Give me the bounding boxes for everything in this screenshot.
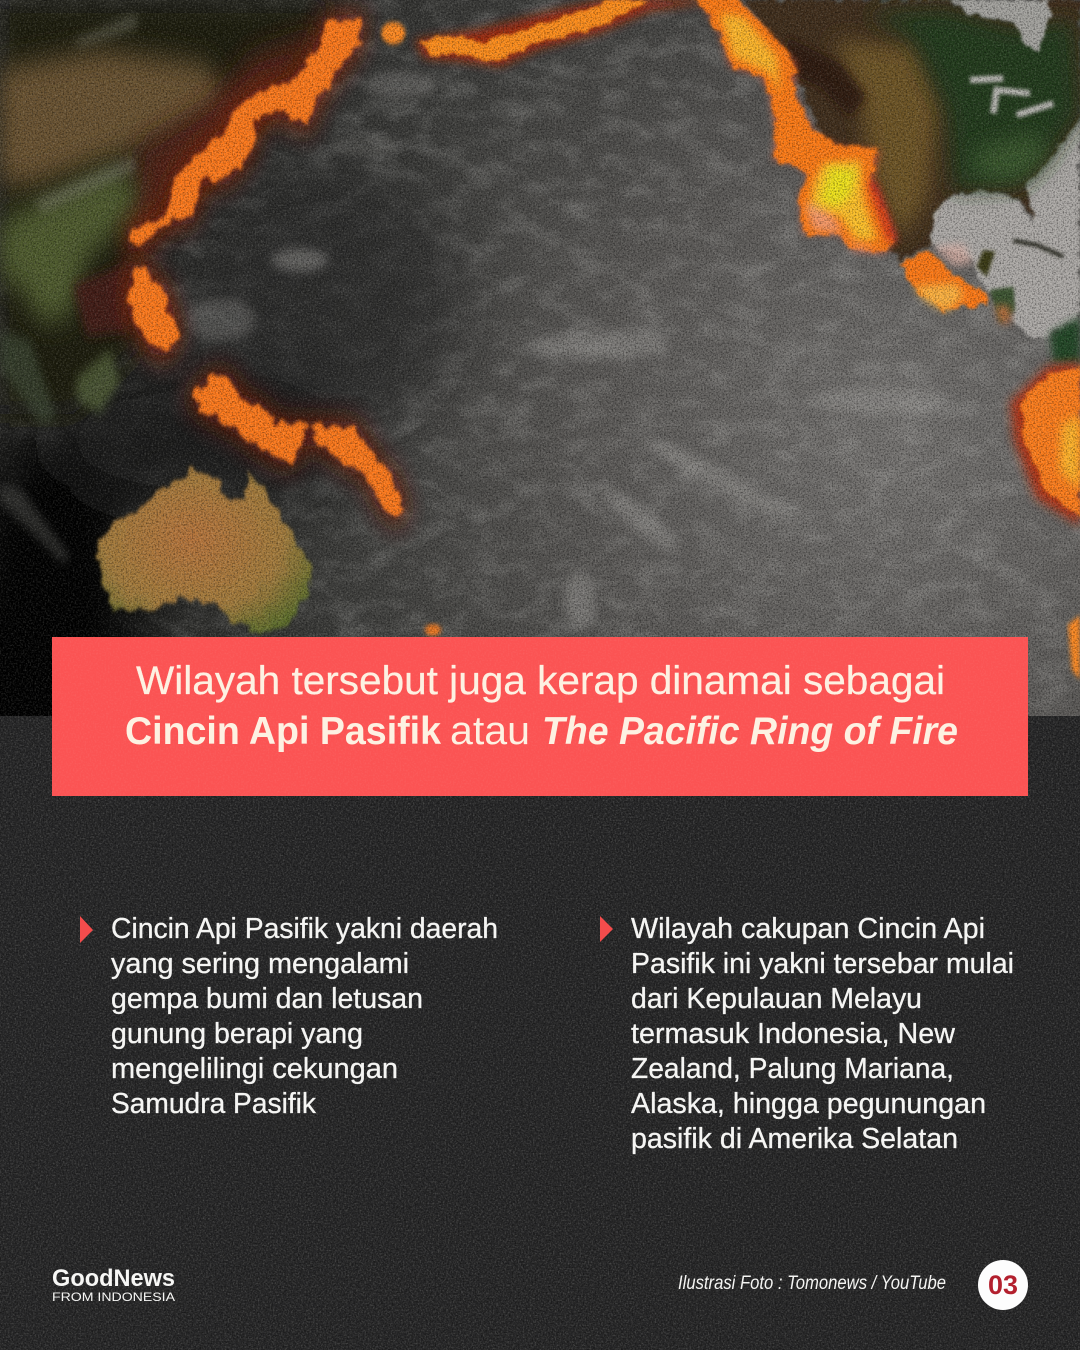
logo: GoodNews from Indonesia: [52, 1265, 175, 1304]
left body text: Cincin Api Pasifik yakni daerah: [111, 913, 498, 945]
ring of fire: western arc, Japan to Philippines: [130, 21, 405, 517]
land: Australia: [97, 469, 310, 635]
right body text: Zealand, Palung Mariana,: [631, 1053, 954, 1085]
right body text: [631, 913, 1014, 1155]
bullet column: right: [600, 913, 1014, 1155]
page number badge: 03: [988, 1270, 1018, 1300]
logo: GoodNews from Indonesia: FROM INDONESIA: [52, 1290, 175, 1304]
ring of fire: New Guinea and Melanesia: [192, 377, 403, 518]
right body text: dari Kepulauan Melayu: [631, 983, 922, 1015]
land: North America: [747, 0, 1080, 363]
ring of fire: northern arc: [415, 0, 720, 66]
title line two: Cincin Api Pasifik: [125, 710, 442, 753]
dark western ocean shading: [0, 170, 460, 770]
black lower-left corner: [0, 680, 22, 716]
left body text: [111, 913, 498, 1120]
title line two: The Pacific Ring of Fire: [542, 710, 958, 753]
ring of fire: North and Central America: [700, 0, 1010, 323]
icon: red triangle bullet: [80, 916, 93, 943]
icon: red triangle bullet: [600, 916, 613, 942]
background photo: Pacific Ring of Fire map: [0, 0, 1080, 770]
right body text: termasuk Indonesia, New: [631, 1018, 955, 1050]
right body text: pasifik di Amerika Selatan: [631, 1123, 958, 1155]
land: Asia and Southeast Asia: [0, 0, 333, 635]
title line two: [125, 709, 958, 753]
page number badge: [978, 1260, 1028, 1310]
ring of fire: small ember: [381, 22, 405, 44]
title line two: atau: [450, 709, 530, 753]
title line one: Wilayah tersebut juga kerap dinamai sebagai: [136, 659, 945, 703]
Greenland / Canada gray land: [950, 0, 1050, 53]
left body text: yang sering mengalami: [111, 948, 409, 980]
dark lower panel: [0, 716, 1080, 1350]
left body text: gunung berapi yang: [111, 1018, 363, 1050]
left body text: gempa bumi dan letusan: [111, 983, 423, 1015]
title banner: [52, 637, 1028, 796]
photo credit: Ilustrasi Foto : Tomonews / YouTube: [678, 1273, 946, 1294]
ring of fire: Philippines: [130, 269, 177, 352]
logo: GoodNews from Indonesia: GoodNews: [52, 1265, 175, 1292]
bullet column: left: [80, 913, 498, 1120]
left body text: Samudra Pasifik: [111, 1088, 317, 1120]
right body text: Wilayah cakupan Cincin Api: [631, 913, 985, 945]
ocean clouds: [184, 71, 950, 630]
ocean cloud mottling: [0, 0, 1080, 716]
right body text: Alaska, hingga pegunungan: [631, 1088, 986, 1120]
right body text: Pasifik ini yakni tersebar mulai: [631, 948, 1014, 980]
ring of fire: South America: [425, 362, 1080, 680]
left body text: mengelilingi cekungan: [111, 1053, 398, 1085]
